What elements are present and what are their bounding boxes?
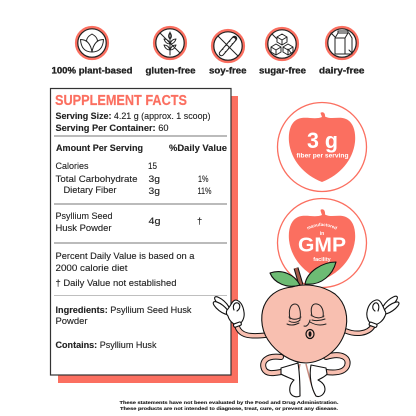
badge: 3 g fiber per serving: fiber per serving <box>296 154 349 160</box>
icon: plant-based leaves <box>76 27 108 59</box>
psyllium row: 4g <box>148 216 160 226</box>
icon row: dietary claims <box>52 27 364 76</box>
right glove <box>367 294 401 328</box>
badge: manufactured in GMP facility <box>276 198 368 288</box>
psyllium row: Psyllium Seed <box>56 211 112 221</box>
panel: supplement facts <box>50 88 231 375</box>
arms <box>237 326 373 336</box>
nutrition rows: Total Carbohydrate <box>56 174 138 184</box>
nutrition rows: 3g <box>148 186 160 196</box>
nutrition rows: 11% <box>198 186 212 196</box>
label: 100% plant-based: 100% plant-based <box>52 66 133 76</box>
nutrition rows: Calories <box>56 161 89 171</box>
badge: manufactured in GMP facility: GMP <box>298 234 346 256</box>
table header <box>56 143 227 153</box>
panel shadow <box>58 96 238 383</box>
leaves <box>270 272 300 286</box>
badge: 3 g fiber per serving: 3 g <box>307 128 338 153</box>
peach body <box>262 285 347 363</box>
psyllium row: Husk Powder <box>56 223 112 233</box>
badge: manufactured in GMP facility: in <box>320 231 324 237</box>
serving information <box>56 111 210 133</box>
stem <box>296 268 301 285</box>
nutrition rows: 1% <box>198 174 208 184</box>
serving information: Serving Size: 4.21 g (approx. 1 scoop) <box>56 111 210 121</box>
daily value notes <box>56 251 195 288</box>
ingredients: Contains: Psyllium Husk <box>56 340 157 350</box>
badge: manufactured in GMP facility: manufactured <box>307 222 338 230</box>
face <box>287 304 326 325</box>
nutrition rows: 3g <box>148 174 160 184</box>
table header: Amount Per Serving <box>56 143 143 153</box>
badge: 3 g fiber per serving <box>278 102 366 192</box>
psyllium row <box>56 211 202 233</box>
daily value notes: † Daily Value not established <box>56 278 176 288</box>
icon: dairy-free milk carton <box>326 27 358 59</box>
serving information: Serving Per Container: 60 <box>56 123 168 133</box>
disclaimer <box>120 400 338 411</box>
disclaimer: These products are not intended to diagnose, treat, cure, or prevent any disease. <box>120 406 338 411</box>
label: sugar-free: sugar-free <box>259 66 306 76</box>
mouth <box>306 330 314 338</box>
feet <box>281 363 300 397</box>
ingredients: Powder <box>56 316 88 326</box>
shins <box>298 364 316 396</box>
ingredients: Ingredients: Psyllium Seed Husk <box>56 305 192 315</box>
label: gluten-free: gluten-free <box>146 66 196 76</box>
psyllium row: † <box>197 216 202 226</box>
icon: sugar-free cubes <box>266 28 298 60</box>
legs <box>263 355 348 373</box>
heading: supplement facts: SUPPLEMENT FACTS <box>55 93 187 109</box>
nutrition rows: 15 <box>148 161 157 171</box>
nutrition rows <box>56 161 212 196</box>
peach mascot <box>212 262 401 397</box>
ingredients <box>56 305 192 350</box>
icon: soy-free beans <box>212 30 244 62</box>
disclaimer: These statements have not been evaluated by the Food and Drug Administration. <box>120 400 338 405</box>
nutrition rows: Dietary Fiber <box>64 185 116 195</box>
left glove <box>212 295 244 328</box>
table header: %Daily Value <box>169 143 227 153</box>
label: dairy-free: dairy-free <box>319 66 364 76</box>
label: soy-free: soy-free <box>209 66 246 76</box>
daily value notes: 2000 calorie diet <box>56 263 128 273</box>
icon: gluten-free wheat <box>154 27 186 59</box>
daily value notes: Percent Daily Value is based on a <box>56 251 195 261</box>
badge: manufactured in GMP facility: facility <box>313 257 332 263</box>
